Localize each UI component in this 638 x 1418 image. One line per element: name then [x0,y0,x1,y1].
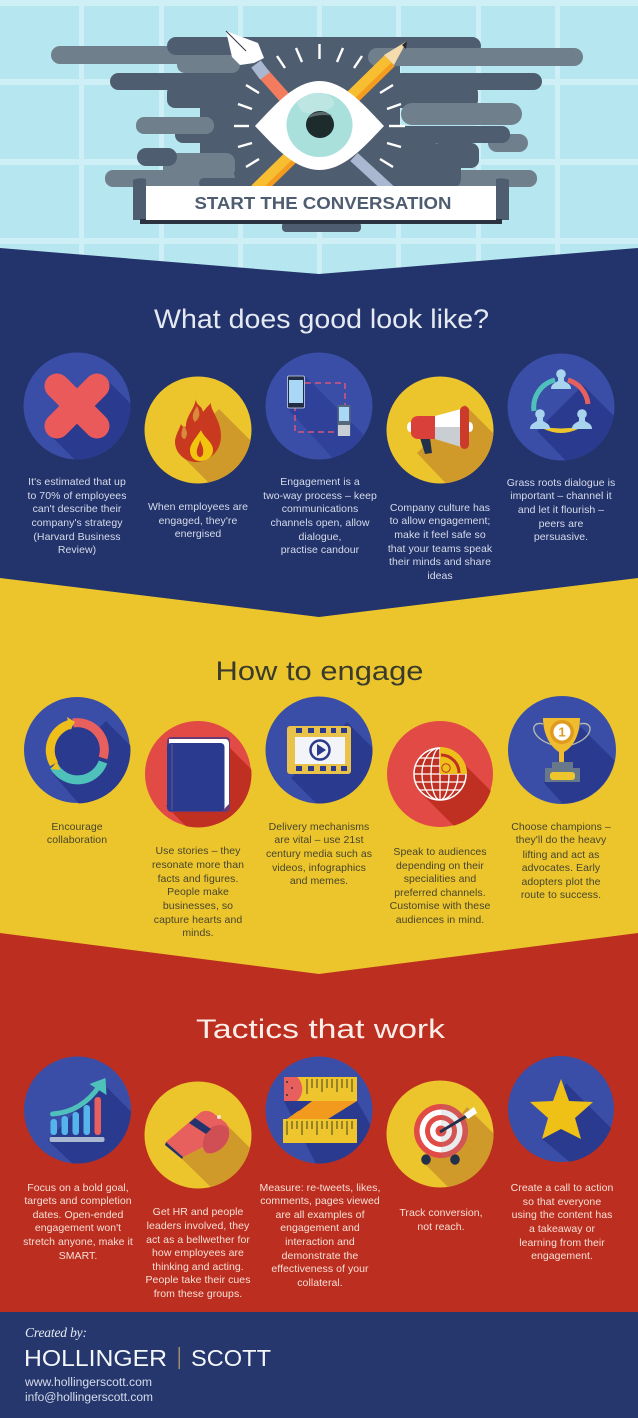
sunburst ticks [234,44,405,167]
text: energised: energised [175,528,221,540]
icon: star [508,1056,614,1162]
text: audiences: Customise with these [390,900,491,912]
text: champions: adopters plot the [521,876,601,888]
icon: megaphone [386,376,494,484]
footer: contact: www.hollingerscott.com [24,1377,152,1389]
text: bold goal: targets and completion [24,1195,132,1207]
text: bold goal: engagement won't [35,1222,121,1234]
text: culture: make it feel safe so [394,529,486,541]
eye [255,81,384,170]
icon: film [266,696,372,804]
text: energised: When employees are [148,501,248,513]
text: audiences: preferred channels. [394,887,486,899]
text: stories: minds. [182,927,214,939]
heading: what does good look like: What does good look like? [154,304,489,334]
text: delivery: are vital – use 21st [274,834,364,846]
banner [133,178,509,224]
text: estimated: (Harvard Business [33,531,121,543]
icon: trophy: 1 [558,724,566,740]
panel: what does good look like [0,248,638,640]
icon: whistle [144,1082,252,1188]
text: two-way: communications [282,503,358,515]
text: culture: their minds and share [389,556,491,568]
icon: cycle arrows [24,697,130,804]
icon: trophy [508,696,616,804]
text: measure: engagement and [280,1222,360,1234]
text: call to action: using the content has [512,1209,612,1221]
text: audiences: depending on their [396,860,484,872]
text: measure: are all examples of [275,1209,365,1221]
text: two-way: dialogue, [298,531,342,543]
icon: people circle [508,354,614,460]
text: HR: from these groups. [154,1288,242,1300]
text: audiences: audiences in mind. [396,914,484,926]
text: stories: capture hearts and [154,914,242,926]
footer: logo: SCOTT [191,1345,271,1371]
text: measure: Measure: re-tweets, likes, [260,1182,380,1194]
text: grass roots: important – channel it [510,490,612,502]
text: conversion: not reach. [417,1221,465,1233]
text: call to action: a takeaway or [529,1223,595,1235]
text: two-way: two-way process – keep [263,490,377,502]
text: culture: that your teams speak [388,543,493,555]
text: stories: businesses, so [163,900,233,912]
footer: contact [24,1377,153,1404]
text: HR: thinking and acting. [152,1261,244,1273]
text: HR: leaders involved, they [147,1220,250,1232]
text: two-way: channels open, allow [270,517,370,529]
icon: target [386,1080,494,1188]
text: champions: advocates. Early [522,862,601,874]
panel: how to engage [0,578,638,990]
text: call to action: engagement. [531,1250,593,1262]
clouds [51,37,583,232]
text: HR: Get HR and people [153,1206,243,1218]
panel: tactics that work [0,933,638,1312]
footer: logo: HOLLINGER [24,1345,167,1371]
text: grass roots: peers are [539,518,584,530]
text: bold goal: dates. Open-ended [33,1209,123,1221]
heading: tactics that work: Tactics that work [196,1014,446,1044]
footer: created by: Created by: [25,1325,87,1340]
fountain pen [226,31,392,192]
text: champions: route to success. [521,889,601,901]
text: bold goal: stretch anyone, make it [23,1236,133,1248]
footer: contact: info@hollingerscott.com [25,1392,153,1404]
icon: red cross [24,352,130,460]
icon: phones [266,352,372,460]
text: stories: People make [167,886,229,898]
text: audiences: Speak to audiences [393,846,487,858]
text: call to action: learning from their [519,1237,605,1249]
text: call to action: Create a call to action [511,1182,613,1194]
text: collaboration: Encourage [51,821,103,833]
text: measure: comments, pages viewed [260,1195,380,1207]
text: delivery: century media such as [266,848,372,860]
footer: logo [24,1345,271,1371]
panel: footer [0,1312,638,1418]
text: culture: ideas [427,570,453,582]
text: champions: Choose champions – [511,821,611,833]
heading: how to engage: How to engage [216,656,424,686]
text: champions: lifting and act as [523,849,599,861]
text: measure: collateral. [297,1277,343,1289]
text: stories: resonate more than [152,859,244,871]
text: energised: engaged, they're [159,515,237,527]
text: HR: People take their cues [146,1274,250,1286]
text: HR: how employees are [152,1247,244,1259]
text: call to action: so that everyone [523,1196,601,1208]
text: measure: demonstrate the [282,1250,358,1262]
text: culture: Company culture has [390,502,490,514]
text: stories: facts and figures. [158,873,238,885]
text: two-way: practise candour [281,544,360,556]
text: estimated: company's strategy [31,517,123,529]
hero background [0,0,638,300]
text: delivery: and memes. [290,875,348,887]
text: culture: to allow engagement; [390,515,490,527]
text: estimated: Review) [58,544,96,556]
icon: growth chart [24,1056,131,1164]
banner title: START THE CONVERSATION [194,193,452,213]
text: grass roots: persuasive. [534,531,588,543]
text: conversion: Track conversion, [399,1207,483,1219]
text: champions: they'll do the heavy [516,834,607,846]
text: measure: effectiveness of your [271,1263,369,1275]
text: collaboration: collaboration [47,834,107,846]
icon: book [145,721,252,828]
pencil [256,41,407,194]
text: measure: interaction and [285,1236,355,1248]
icon: globe rss [387,721,493,827]
text: audiences: specialities and [404,873,476,885]
icon: measuring tapes [266,1056,372,1164]
text: two-way: Engagement is a [280,476,360,488]
text: HR: act as a bellwether for [146,1234,250,1246]
text: grass roots: and let it flourish – [518,504,604,516]
text: grass roots: Grass roots dialogue is [507,477,615,489]
text: stories: Use stories – they [156,845,241,857]
text: delivery: videos, infographics [272,862,366,874]
text: bold goal: SMART. [59,1250,97,1262]
text: bold goal: Focus on a bold goal, [27,1182,129,1194]
icon: flame [144,376,252,484]
text: estimated: to 70% of employees [27,490,127,502]
text: estimated: can't describe their [33,503,122,515]
text: estimated: It's estimated that up [28,476,126,488]
text: delivery: Delivery mechanisms [269,821,369,833]
